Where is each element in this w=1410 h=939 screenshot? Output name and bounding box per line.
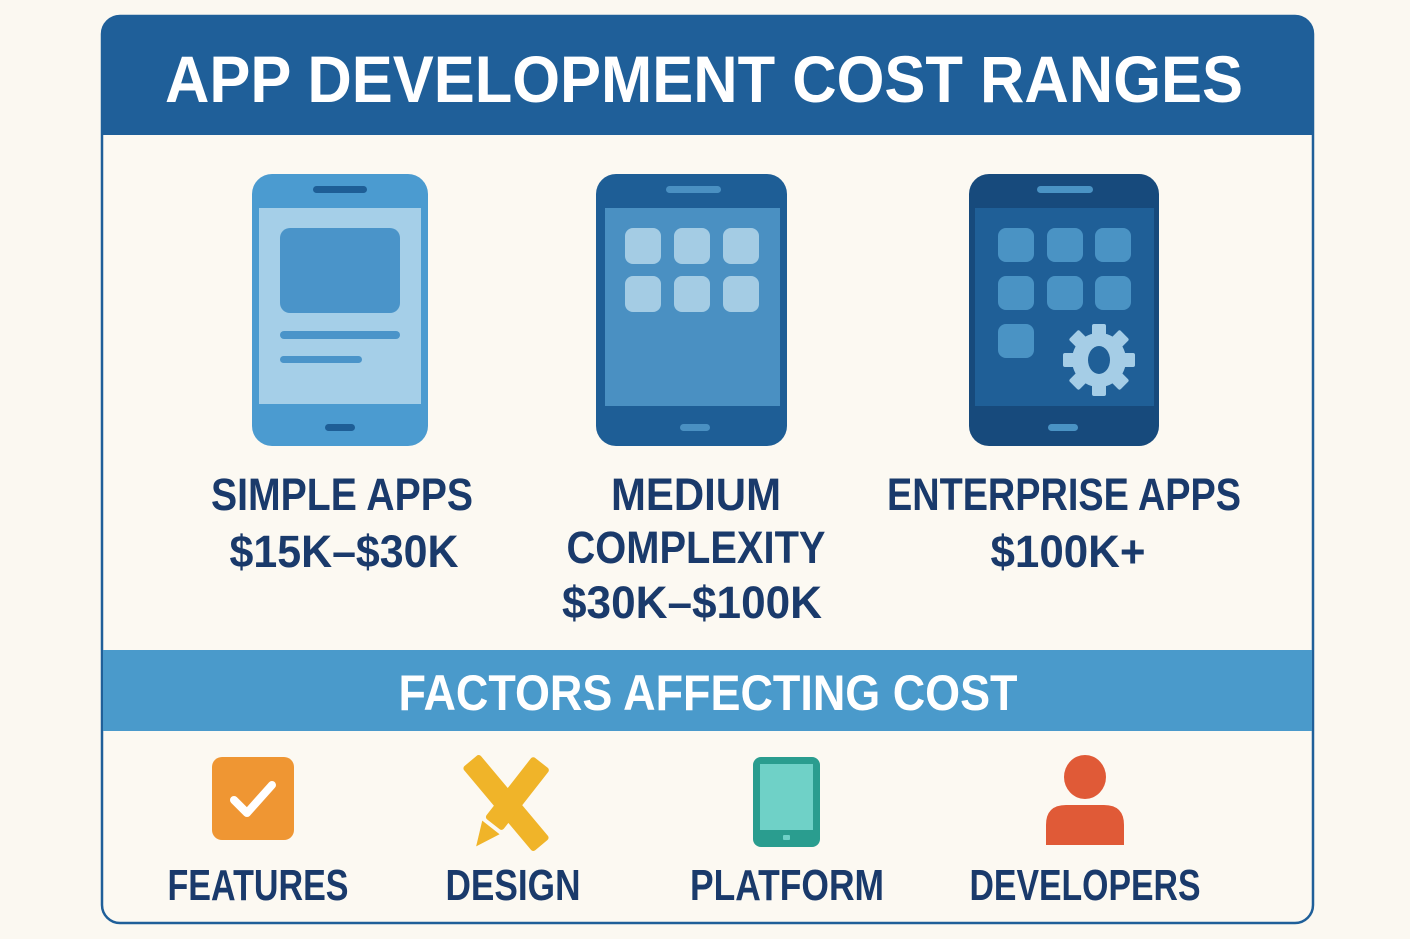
factor labels <box>168 861 1200 910</box>
label: enterprise <box>887 469 1241 577</box>
label: medium: COMPLEXITY <box>566 522 826 573</box>
factor labels: DEVELOPERS <box>970 861 1200 910</box>
label: medium: MEDIUM <box>611 469 781 520</box>
phone: medium <box>596 174 787 446</box>
phone: simple <box>252 174 428 446</box>
factors bar: FACTORS AFFECTING COST <box>398 665 1018 721</box>
factor labels: PLATFORM <box>690 861 884 910</box>
label: enterprise: $100K+ <box>990 526 1146 577</box>
icon: developers <box>1046 755 1124 845</box>
factors bar <box>103 650 1312 731</box>
icon: features <box>212 757 294 840</box>
label: medium <box>562 469 826 628</box>
header bar <box>102 16 1313 135</box>
icon: platform <box>753 757 820 847</box>
factor labels: DESIGN <box>446 861 580 910</box>
title: APP DEVELOPMENT COST RANGES <box>165 42 1243 116</box>
icon: design <box>462 754 550 853</box>
label: simple apps: $15K–$30K <box>230 526 459 577</box>
label: enterprise: ENTERPRISE APPS <box>887 469 1241 520</box>
phone: enterprise <box>969 174 1159 446</box>
label: medium: $30K–$100K <box>562 577 822 628</box>
icon: gear <box>1063 324 1135 396</box>
label: simple apps: SIMPLE APPS <box>211 469 473 520</box>
label: simple apps <box>211 469 473 577</box>
factor labels: FEATURES <box>168 861 348 910</box>
